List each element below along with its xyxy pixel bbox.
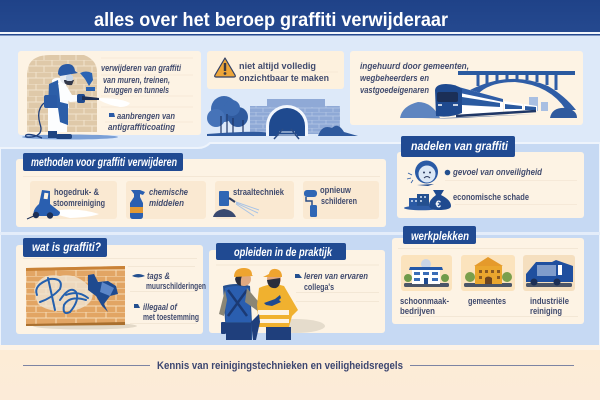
text: hogedruk- & stoomreiniging: stoomreiniging bbox=[53, 198, 105, 208]
text: tags & muurschilderingen: muurschilderingen bbox=[146, 281, 206, 291]
text: ingehuurd door gemeenten: vastgoedeigenaren bbox=[360, 85, 429, 95]
text: aanbrengen van antigraffiticoating: antigraffiticoating bbox=[108, 122, 175, 132]
panel: ingehuurd door gemeenten bbox=[350, 51, 583, 125]
badge: wat is graffiti? bbox=[23, 238, 107, 257]
badge: werkplekken: werkplekken bbox=[411, 231, 469, 243]
icon: bullet bbox=[295, 274, 302, 278]
panel: nadelen van graffiti bbox=[397, 136, 584, 218]
icon: office building bbox=[404, 259, 449, 287]
footer text: Kennis van reinigingstechnieken en veiligheidsregels bbox=[157, 360, 403, 372]
footer band bbox=[0, 345, 600, 400]
text: leren van ervaren collega's: collega's bbox=[304, 282, 334, 292]
illustration: two workers bbox=[219, 268, 325, 340]
body bbox=[52, 78, 69, 108]
icon: worried face bbox=[407, 160, 438, 186]
text: schoonmaak-bedrijven bbox=[400, 296, 449, 316]
text: industriële reiniging bbox=[530, 296, 569, 316]
panel: wat is graffiti? bbox=[16, 238, 206, 334]
text: niet altijd volledig onzichtbaar te maken bbox=[239, 61, 329, 83]
icon: bullet bbox=[109, 113, 115, 117]
badge: wat is graffiti?: wat is graffiti? bbox=[32, 242, 101, 254]
text: opnieuw schilderen bbox=[320, 185, 357, 206]
left worker bbox=[223, 284, 252, 340]
text: aanbrengen van antigraffiticoating: aanbrengen van bbox=[117, 111, 175, 121]
text: gemeentes: gemeentes bbox=[468, 296, 506, 306]
text: leren van ervaren collega's: leren van ervaren bbox=[304, 271, 368, 281]
text: verwijderen van graffiti: bruggen en tunnels bbox=[104, 85, 169, 95]
text: schoonmaak-bedrijven: bedrijven bbox=[400, 306, 435, 316]
text: leren van ervaren collega's bbox=[304, 271, 368, 292]
card: industriële reiniging bbox=[523, 255, 575, 291]
bullet bbox=[445, 170, 450, 175]
badge: nadelen van graffiti bbox=[401, 136, 515, 157]
icon: paint roller bbox=[304, 190, 317, 217]
hose bbox=[26, 103, 44, 138]
legs bbox=[48, 106, 67, 132]
text: tags & muurschilderingen: tags & bbox=[147, 271, 170, 281]
panel: niet altijd volledig bbox=[207, 51, 344, 89]
text: gevoel van onveiligheid: gevoel van onveiligheid bbox=[452, 167, 542, 177]
text: ingehuurd door gemeenten bbox=[360, 61, 469, 95]
text: industriële reiniging: reiniging bbox=[530, 306, 562, 316]
illustration: train under bridge bbox=[400, 71, 577, 119]
panel: methoden voor graffiti verwijderen bbox=[16, 153, 386, 227]
title banner bbox=[0, 0, 600, 36]
text: niet altijd volledig onzichtbaar te maken: onzichtbaar te maken bbox=[239, 73, 329, 83]
text: chemische middelen: middelen bbox=[149, 198, 184, 208]
text: verwijderen van graffiti: verwijderen van graffiti bbox=[101, 63, 181, 73]
card: gemeentes bbox=[461, 255, 515, 291]
text: hogedruk- & stoomreiniging: hogedruk- & bbox=[54, 187, 99, 197]
card: straaltechniek bbox=[213, 181, 294, 219]
badge: opleiden in de praktijk: opleiden in de praktijk bbox=[234, 247, 332, 259]
badge: methoden voor graffiti verwijderen bbox=[23, 153, 183, 171]
icon: bullet bbox=[134, 304, 140, 308]
text: chemische middelen bbox=[149, 187, 188, 208]
text: niet altijd volledig onzichtbaar te maken: niet altijd volledig bbox=[239, 61, 316, 71]
text: illegaal of met toestemming bbox=[143, 302, 199, 322]
panel: werkplekken bbox=[392, 226, 584, 324]
illustration: worker removing graffiti with pressure washer bbox=[22, 55, 130, 140]
head bbox=[60, 72, 72, 84]
text: straaltechniek: straaltechniek bbox=[233, 187, 285, 197]
text: illegaal of met toestemming: met toestemming bbox=[143, 312, 199, 322]
text: opnieuw schilderen: schilderen bbox=[321, 196, 357, 206]
icon: pressure washer bbox=[27, 190, 99, 219]
text: illegaal of met toestemming: illegaal of bbox=[143, 302, 178, 312]
text: schoonmaak-bedrijven: schoonmaak- bbox=[400, 296, 449, 306]
illustration: tunnel with trees and tracks bbox=[207, 96, 358, 139]
icon: spray bottle bbox=[130, 190, 145, 219]
card: chemische middelen bbox=[126, 181, 206, 219]
illustration: brick wall with graffiti bbox=[26, 266, 137, 330]
text: verwijderen van graffiti: van muren, treinen, bbox=[103, 75, 170, 85]
text: tags & muurschilderingen bbox=[146, 271, 206, 291]
text: aanbrengen van antigraffiticoating bbox=[108, 111, 175, 132]
badge: opleiden in de praktijk bbox=[216, 243, 346, 260]
background: upper band bbox=[0, 35, 600, 150]
text: industriële reiniging: industriële bbox=[530, 296, 569, 306]
spray bbox=[99, 98, 130, 107]
badge: nadelen van graffiti: nadelen van graffiti bbox=[411, 141, 509, 153]
icon: blasting nozzle bbox=[213, 191, 259, 217]
text: ingehuurd door gemeenten: ingehuurd door gemeenten, bbox=[360, 61, 469, 71]
text: verwijderen van graffiti bbox=[101, 63, 181, 95]
icon: money bag and buildings bbox=[404, 190, 451, 210]
icon: warning triangle bbox=[215, 58, 235, 77]
card: opnieuw schilderen bbox=[303, 181, 379, 219]
text: ingehuurd door gemeenten: wegbeheerders en bbox=[360, 73, 429, 83]
text: chemische middelen: chemische bbox=[149, 187, 188, 197]
graffiti remains bbox=[80, 72, 93, 86]
card: schoonmaakbedrijven bbox=[401, 255, 452, 291]
pointing glove bbox=[264, 295, 281, 306]
text: economische schade: economische schade bbox=[453, 192, 529, 202]
background: lower band bbox=[0, 143, 600, 346]
text: hogedruk- & stoomreiniging bbox=[53, 187, 105, 208]
badge: methoden voor graffiti verwijderen: methoden voor graffiti verwijderen bbox=[31, 157, 177, 169]
train cars bbox=[455, 86, 503, 117]
panel: opleiden in de praktijk bbox=[209, 243, 385, 340]
icon: cleaning truck bbox=[526, 260, 573, 287]
text: opnieuw schilderen: opnieuw bbox=[320, 185, 352, 195]
arm and lance bbox=[58, 82, 80, 102]
card: hogedruk- & stoomreiniging bbox=[27, 181, 117, 219]
panel: verwijderen van graffiti bbox=[18, 51, 201, 140]
title: alles over het beroep graffiti verwijderaar bbox=[94, 9, 448, 31]
icon: dash bbox=[132, 274, 145, 278]
icon: town hall bbox=[464, 257, 512, 287]
icon: money bag and buildings: € bbox=[436, 200, 442, 210]
right worker bbox=[257, 284, 298, 327]
badge: werkplekken bbox=[403, 226, 476, 244]
